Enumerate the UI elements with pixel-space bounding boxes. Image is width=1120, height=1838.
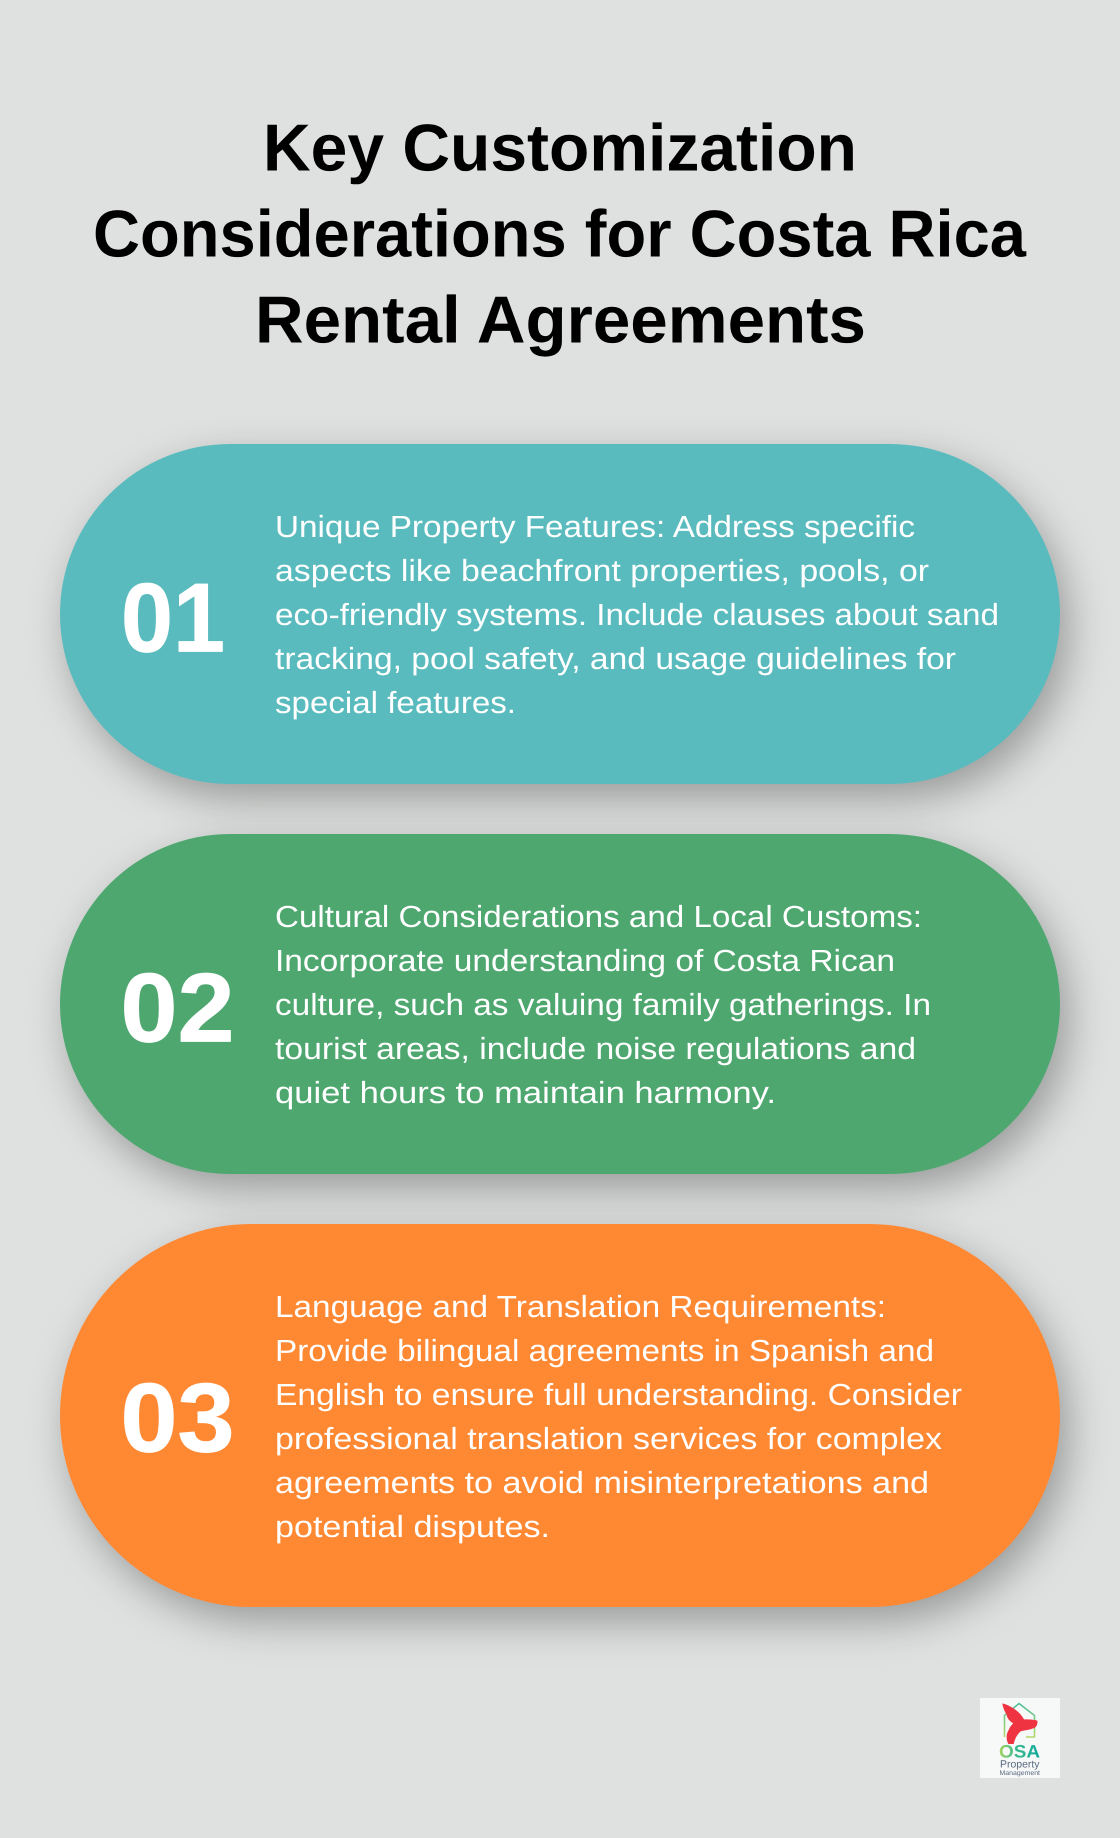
text block 03 (275, 1290, 962, 1544)
text block 02: Cultural Considerations and Local Customs: (275, 900, 922, 934)
logo: OSA Property Management (980, 1698, 1060, 1778)
number 01: 01 (121, 562, 225, 672)
text block 02 (275, 900, 931, 1110)
text block 03: potential disputes. (275, 1510, 550, 1544)
title: Considerations for Costa Rica (93, 198, 1027, 272)
text block 03: Language and Translation Requirements: (275, 1290, 886, 1324)
text block 03: Provide bilingual agreements in Spanish and (275, 1334, 934, 1368)
logo text Property: Property (1000, 1759, 1040, 1771)
text block 02: tourist areas, include noise regulations and (275, 1032, 916, 1066)
text block 02: quiet hours to maintain harmony. (275, 1076, 776, 1110)
text block 03: agreements to avoid misinterpretations and (275, 1466, 929, 1500)
number 02: 02 (120, 952, 234, 1062)
icon: red bird (1002, 1703, 1038, 1744)
panel: 03 language and translation (60, 1224, 1060, 1607)
panel: 02 cultural considerations (60, 834, 1060, 1174)
logo text Management: Management (1000, 1770, 1040, 1777)
icon: house outline (1004, 1704, 1034, 1737)
title: Rental Agreements (255, 284, 866, 358)
text block 03: English to ensure full understanding. Consider (275, 1378, 962, 1412)
text block 01: aspects like beachfront properties, pools, or (275, 554, 929, 588)
text block 01 (275, 510, 999, 720)
text block 03: professional translation services for complex (275, 1422, 942, 1456)
text block 02: culture, such as valuing family gatherings. In (275, 988, 931, 1022)
number 03: 03 (120, 1362, 234, 1472)
pill background green (60, 834, 1060, 1174)
text block 01: special features. (275, 686, 516, 720)
text block 01: tracking, pool safety, and usage guidelines for (275, 642, 956, 676)
pill background teal (60, 444, 1060, 784)
text block 01: eco-friendly systems. Include clauses about sand (275, 598, 999, 632)
title (93, 112, 1027, 358)
panel: 01 unique property features (60, 444, 1060, 784)
logo wordmark OSA: OSA (999, 1742, 1040, 1762)
text block 01: Unique Property Features: Address specific (275, 510, 915, 544)
title: Key Customization (263, 112, 857, 186)
text block 02: Incorporate understanding of Costa Rican (275, 944, 895, 978)
pill background orange (60, 1224, 1060, 1607)
